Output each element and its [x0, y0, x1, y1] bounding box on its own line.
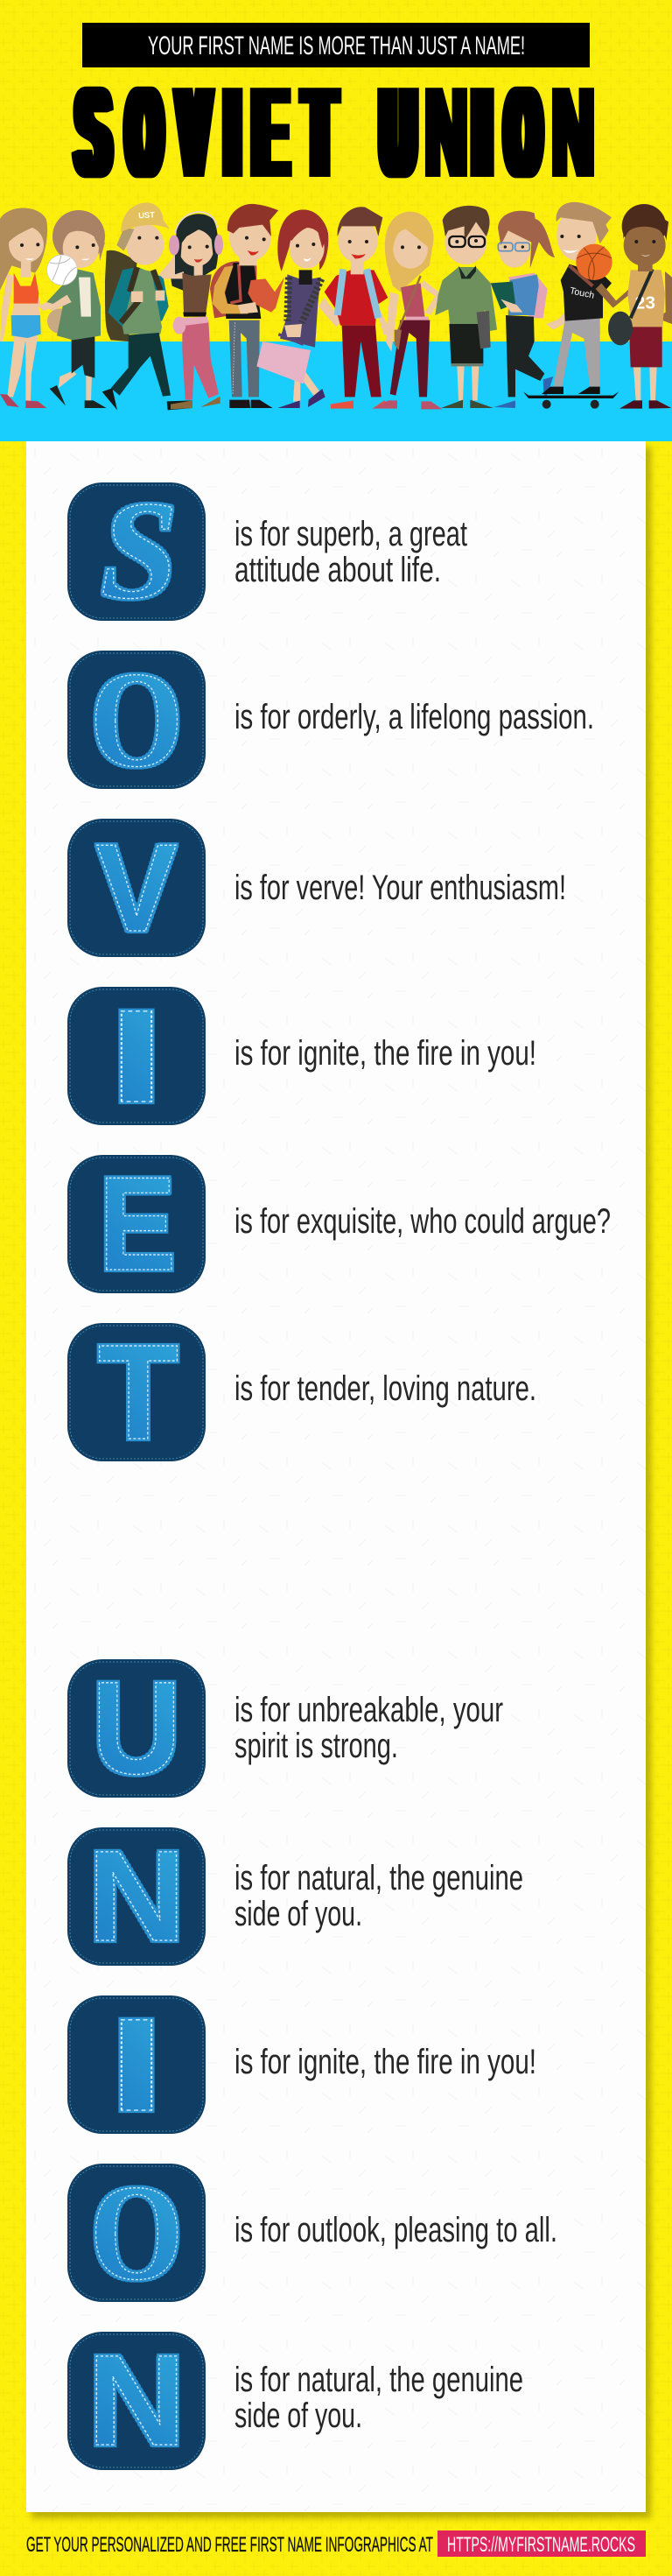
- illustration: group of people, right half: [318, 202, 672, 409]
- person 10: girl with tablet: [491, 211, 555, 408]
- person 3: boy with cap and backpack: UST: [138, 210, 155, 220]
- row N: icon: N: [88, 1825, 186, 1968]
- row U: icon: [67, 1654, 206, 1801]
- title: [77, 61, 594, 203]
- row E: icon: E: [99, 1150, 176, 1299]
- person 5: boy with red book: [210, 204, 284, 408]
- title: E: [254, 61, 287, 203]
- row S: icon: S: [101, 472, 178, 628]
- row U: text: spirit is strong.: [234, 1727, 398, 1765]
- title: V: [178, 61, 209, 203]
- person 7: boy in red shirt: [318, 207, 396, 409]
- row N2: icon: N: [88, 2329, 186, 2473]
- row T: text: is for tender, loving nature.: [234, 1369, 536, 1408]
- row U: icon: U: [92, 1654, 181, 1801]
- row N2: icon: [67, 2329, 206, 2473]
- title: I: [472, 61, 492, 203]
- row I: text: is for ignite, the fire in you!: [234, 1034, 536, 1073]
- person 12: boy in basketball jersey: 23: [635, 293, 655, 313]
- row O2: icon: O: [90, 2157, 183, 2308]
- person 1: girl in orange top: [0, 208, 70, 408]
- panel: letters: [26, 441, 651, 2518]
- row T: icon: T: [98, 1317, 178, 1467]
- title: O: [128, 61, 161, 203]
- row N: icon: [67, 1825, 206, 1968]
- row N2: text: [234, 2361, 523, 2435]
- row N: text: is for natural, the genuine: [234, 1859, 523, 1897]
- text: N: [552, 61, 594, 203]
- row N2: text: is for natural, the genuine: [234, 2361, 523, 2399]
- row S: text: [234, 515, 467, 589]
- row I2: icon: [67, 1991, 206, 2138]
- row N: text: side of you.: [234, 1895, 362, 1933]
- person 3: boy with cap and backpack: [102, 202, 192, 410]
- title: I: [226, 61, 239, 203]
- title: T: [304, 61, 335, 203]
- person 9: boy with glasses: [435, 206, 497, 408]
- tagline bar: [82, 23, 590, 67]
- row S: text: is for superb, a great: [234, 515, 467, 553]
- row E: icon: [67, 1150, 206, 1299]
- illustration: group of people, left half: [0, 202, 328, 410]
- row T: icon: [67, 1317, 206, 1467]
- row O2: text: is for outlook, pleasing to all.: [234, 2211, 557, 2249]
- row I: icon: I: [108, 982, 165, 1130]
- person 12: boy in basketball jersey: [596, 204, 672, 409]
- title: O: [507, 61, 540, 203]
- row N2: text: side of you.: [234, 2397, 362, 2435]
- blue floor band: [0, 341, 672, 441]
- person 4: girl with headphones: [159, 212, 223, 409]
- row I: icon: [67, 982, 206, 1130]
- row I2: icon: I: [108, 1991, 165, 2138]
- person 8: blonde girl: [373, 212, 443, 409]
- person 2: girl with volleyball: [46, 210, 107, 408]
- row U: text: [234, 1691, 503, 1765]
- person 11: skater with basketball: Touch: [569, 285, 595, 301]
- row N: text: [234, 1859, 523, 1933]
- row V: icon: V: [96, 819, 177, 958]
- person 6: girl with pink bag: [256, 209, 328, 408]
- row O: icon: O: [90, 644, 183, 795]
- title: S: [77, 61, 109, 203]
- title: N: [425, 61, 467, 203]
- row S: text: attitude about life.: [234, 551, 441, 589]
- person 11: skater with basketball: [523, 202, 619, 409]
- row U: text: is for unbreakable, your: [234, 1691, 503, 1729]
- title: U: [382, 61, 415, 203]
- row I2: text: is for ignite, the fire in you!: [234, 2043, 536, 2081]
- row S: icon: [67, 472, 206, 628]
- row V: icon: [67, 819, 206, 958]
